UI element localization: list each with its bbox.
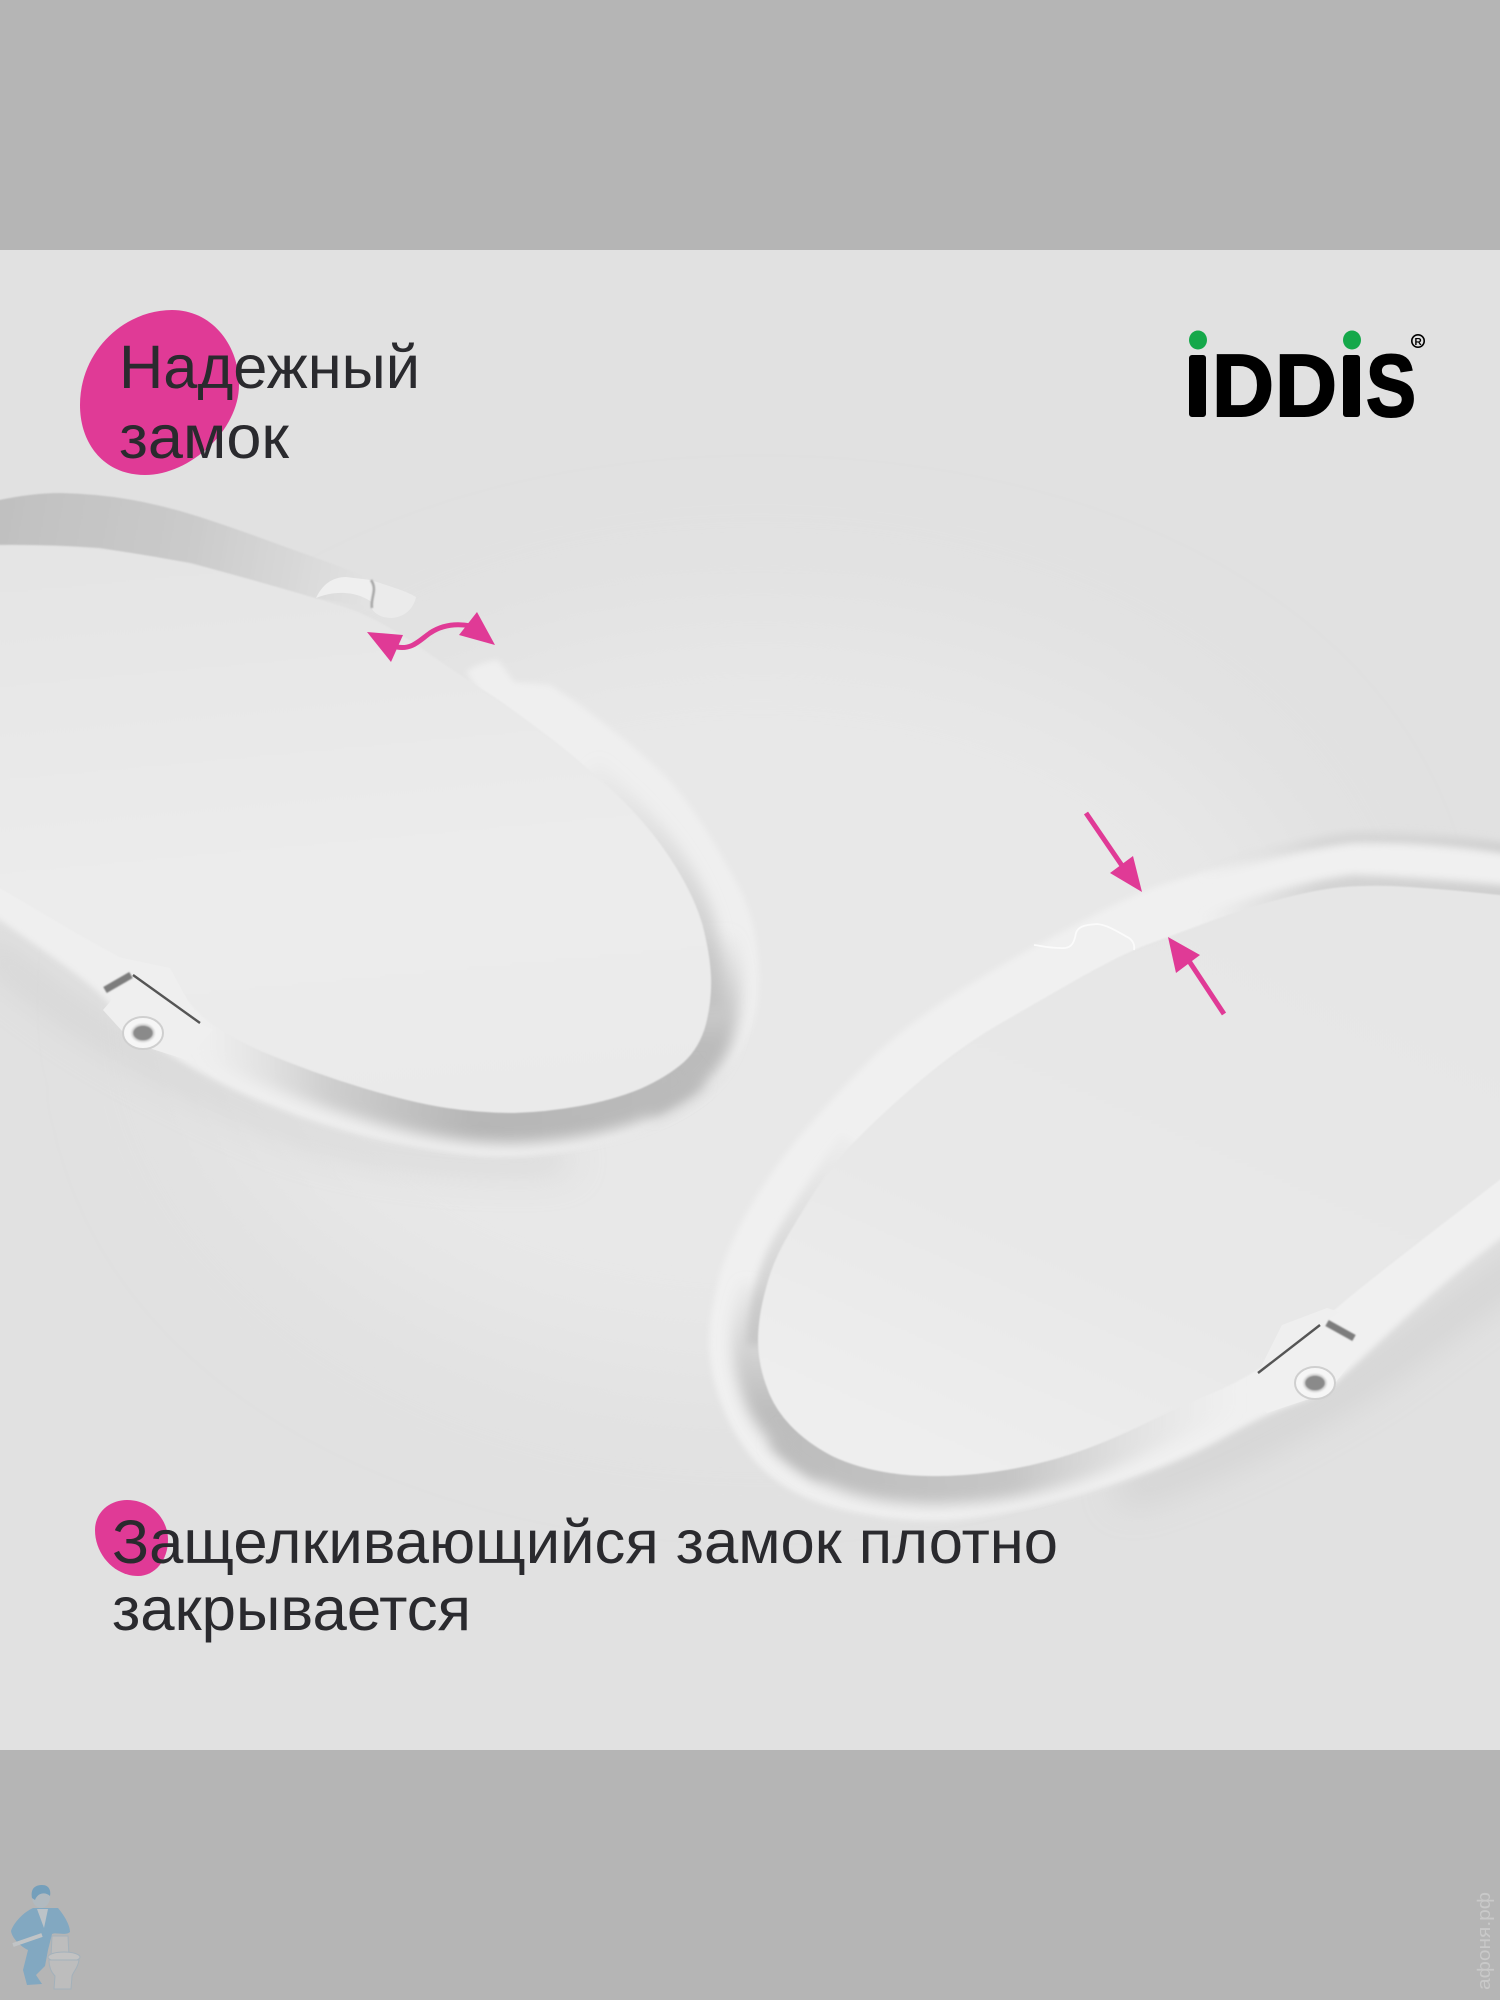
right ring shadow bbox=[1130, 1260, 1500, 1490]
heading bbox=[119, 333, 420, 471]
logo: IDDIS bbox=[1189, 330, 1424, 435]
logo: IDDIS: S bbox=[1366, 336, 1416, 435]
left ring interior bbox=[0, 722, 712, 1114]
watermark: plumber with toilet bbox=[11, 1885, 80, 1989]
heading blob bbox=[80, 310, 239, 475]
upper tube with hook bbox=[0, 493, 416, 618]
arrow: tube width from above bbox=[1086, 813, 1142, 892]
lower tube body with latch bbox=[0, 663, 578, 1156]
caption bbox=[112, 1508, 1058, 1643]
icon: double-headed lock arrow bbox=[367, 612, 495, 662]
arrow: tube width from below bbox=[1168, 937, 1224, 1014]
heading: Надежный bbox=[119, 333, 420, 401]
left ring shadow bbox=[256, 1108, 544, 1168]
tube body bbox=[709, 836, 1500, 1520]
right ring interior bbox=[758, 886, 1500, 1476]
watermark: site name: афоня.рф bbox=[1474, 1892, 1494, 1990]
heading: замок bbox=[119, 403, 289, 471]
lock seam bbox=[1034, 924, 1134, 950]
left ring: opened lock bbox=[0, 493, 759, 1161]
caption: Защелкивающийся замок плотно bbox=[112, 1508, 1058, 1576]
right hinge with nut bbox=[1243, 1308, 1355, 1413]
caption blob bbox=[95, 1500, 168, 1576]
right tube shading bbox=[758, 838, 1500, 1476]
left hinge with nut bbox=[102, 972, 201, 1054]
background panel bbox=[0, 250, 1500, 1750]
logo: IDDIS: D bbox=[1275, 336, 1337, 435]
logo: IDDIS: D bbox=[1212, 336, 1274, 435]
left tube inner shading bbox=[200, 770, 711, 1113]
right ring: closed lock bbox=[709, 836, 1500, 1520]
logo: IDDIS: R bbox=[1414, 337, 1422, 348]
caption: закрывается bbox=[112, 1575, 471, 1643]
